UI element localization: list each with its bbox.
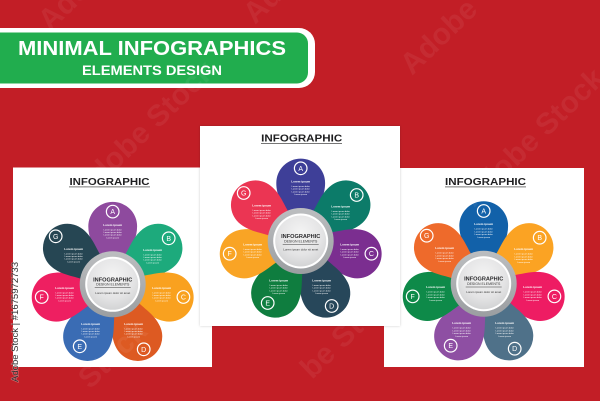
- petal C: Lorem ipsum: [152, 286, 171, 290]
- petal G: Lorem ipsum: [252, 204, 271, 208]
- petal A: Lorem ipsum: [291, 180, 310, 184]
- petal E: [243, 254, 311, 326]
- petal F: Lorem ipsum dolor: [244, 251, 262, 254]
- petal E: [426, 297, 494, 369]
- petal E: Lorem ipsum dolor: [453, 329, 471, 332]
- petal B: [306, 171, 380, 244]
- petal D: D: [512, 346, 517, 353]
- petal E: Lorem ipsum dolor: [270, 287, 288, 290]
- petal D: Lorem ipsum dolor: [125, 333, 143, 336]
- banner: [0, 28, 315, 88]
- petal G: Lorem ipsum dolor: [65, 255, 83, 258]
- petal C: C: [369, 251, 374, 258]
- petal C: Lorem ipsum dolor: [524, 291, 542, 294]
- flower diagram: [27, 202, 198, 369]
- petal G: Lorem ipsum dolor: [436, 254, 454, 257]
- petal G: Lorem ipsum dolor: [253, 214, 271, 217]
- petal F: Lorem ipsum: [55, 286, 74, 290]
- petal B: [118, 214, 192, 287]
- petal E: Lorem ipsum: [84, 335, 97, 338]
- petal F: F: [228, 251, 232, 258]
- petal G: G: [241, 190, 246, 198]
- petal E: Lorem ipsum: [272, 292, 285, 295]
- petal C: Lorem ipsum dolor: [341, 248, 359, 251]
- petal E: Lorem ipsum dolor: [270, 289, 288, 292]
- petal C: [504, 266, 569, 326]
- petal D: Lorem ipsum dolor: [313, 287, 331, 290]
- petal E: Lorem ipsum dolor: [82, 330, 100, 333]
- center hub: DESIGN ELEMENTS: [467, 282, 501, 286]
- petal F: Lorem ipsum dolor: [56, 291, 74, 294]
- center hub: Lorem ipsum dolor sit amet: [466, 290, 501, 294]
- center hub: INFOGRAPHIC: [281, 234, 320, 240]
- petal G: [404, 213, 479, 287]
- petal B: Lorem ipsum dolor: [332, 213, 350, 216]
- petal D: Lorem ipsum: [127, 335, 140, 338]
- petal B: Lorem ipsum: [334, 218, 347, 221]
- petal D: Lorem ipsum dolor: [496, 327, 514, 330]
- banner title: MINIMAL INFOGRAPHICS: [18, 37, 286, 60]
- center hub: Lorem ipsum dolor sit amet: [95, 291, 130, 295]
- petal C: Lorem ipsum dolor: [153, 291, 171, 294]
- petal D: Lorem ipsum: [498, 335, 511, 338]
- petal D: Lorem ipsum dolor: [496, 329, 514, 332]
- petal G: Lorem ipsum: [64, 247, 83, 251]
- panel: left infographic: [13, 168, 212, 369]
- petal A: [88, 202, 137, 258]
- petal D: Lorem ipsum dolor: [313, 284, 331, 287]
- petal B: Lorem ipsum: [143, 248, 162, 252]
- petal D: Lorem ipsum: [495, 321, 514, 325]
- center hub: DESIGN ELEMENTS: [284, 239, 318, 243]
- petal G: Lorem ipsum: [438, 260, 451, 263]
- petal A: Lorem ipsum dolor: [104, 231, 122, 234]
- petal B: Lorem ipsum dolor: [144, 253, 162, 256]
- petal G: Lorem ipsum: [255, 217, 268, 220]
- petal A: Lorem ipsum dolor: [292, 185, 310, 188]
- petal B: Lorem ipsum dolor: [515, 255, 533, 258]
- petal D: Lorem ipsum: [315, 292, 328, 295]
- petal A: [459, 201, 508, 258]
- panel title: INFOGRAPHIC: [261, 132, 343, 144]
- petal F: Lorem ipsum: [426, 285, 445, 289]
- petal E: Lorem ipsum dolor: [270, 284, 288, 287]
- petal E: E: [448, 343, 453, 350]
- petal B: Lorem ipsum: [331, 204, 350, 208]
- petal C: C: [552, 294, 557, 301]
- center hub: [268, 208, 334, 274]
- petal C: C: [181, 294, 186, 301]
- petal F: Lorem ipsum dolor: [56, 297, 74, 300]
- petal G: Lorem ipsum dolor: [65, 258, 83, 261]
- petal E: Lorem ipsum dolor: [453, 327, 471, 330]
- panel: right infographic: [384, 168, 584, 369]
- petal B: Lorem ipsum dolor: [144, 256, 162, 259]
- petal A: A: [298, 166, 303, 173]
- banner subtitle: ELEMENTS DESIGN: [82, 63, 222, 78]
- petal C: Lorem ipsum: [343, 256, 356, 259]
- petal B: Lorem ipsum dolor: [515, 258, 533, 261]
- petal E: Lorem ipsum: [81, 322, 100, 326]
- petal F: [398, 266, 464, 326]
- petal A: A: [110, 209, 115, 216]
- petal F: [27, 266, 93, 326]
- petal F: Lorem ipsum: [246, 256, 259, 259]
- petal B: B: [166, 236, 171, 243]
- petal B: Lorem ipsum: [517, 261, 530, 264]
- center hub: [451, 251, 517, 317]
- petal B: [489, 213, 563, 287]
- petal E: [55, 297, 123, 369]
- petal A: Lorem ipsum: [477, 236, 490, 239]
- center hub: DESIGN ELEMENTS: [96, 283, 130, 287]
- petal F: Lorem ipsum dolor: [244, 253, 262, 256]
- petal D: Lorem ipsum dolor: [125, 327, 143, 330]
- petal D: Lorem ipsum dolor: [496, 332, 514, 335]
- petal A: Lorem ipsum dolor: [292, 190, 310, 193]
- petal A: Lorem ipsum: [294, 193, 307, 196]
- petal A: Lorem ipsum: [106, 236, 119, 239]
- petal G: G: [424, 233, 429, 240]
- petal C: Lorem ipsum dolor: [153, 294, 171, 297]
- petal D: D: [329, 304, 334, 310]
- petal G: G: [53, 234, 58, 241]
- petal D: Lorem ipsum: [312, 278, 331, 282]
- petal F: F: [411, 294, 415, 301]
- petal E: Lorem ipsum: [455, 335, 468, 338]
- petal B: Lorem ipsum dolor: [515, 253, 533, 256]
- petal A: Lorem ipsum dolor: [104, 228, 122, 231]
- flower diagram: [215, 159, 386, 326]
- petal C: [321, 223, 386, 283]
- petal D: Lorem ipsum: [124, 322, 143, 326]
- watermarks: be Stock: [294, 274, 407, 385]
- petal D: [290, 254, 358, 326]
- petal E: E: [77, 344, 82, 351]
- petal F: Lorem ipsum: [58, 299, 71, 302]
- center hub: INFOGRAPHIC: [93, 277, 132, 283]
- petal E: Lorem ipsum: [269, 278, 288, 282]
- center hub: INFOGRAPHIC: [464, 277, 503, 283]
- petal C: Lorem ipsum dolor: [341, 253, 359, 256]
- petal D: [102, 297, 170, 369]
- petal G: [221, 171, 296, 244]
- petal G: Lorem ipsum dolor: [436, 252, 454, 255]
- petal G: Lorem ipsum: [435, 246, 454, 250]
- petal F: Lorem ipsum dolor: [56, 294, 74, 297]
- petal G: Lorem ipsum dolor: [65, 252, 83, 255]
- center hub: Lorem ipsum dolor sit amet: [283, 248, 318, 252]
- petal C: Lorem ipsum dolor: [153, 297, 171, 300]
- panel title: INFOGRAPHIC: [445, 176, 526, 188]
- petal B: B: [537, 235, 542, 242]
- petal A: Lorem ipsum: [474, 222, 493, 226]
- petal A: Lorem ipsum: [103, 223, 122, 227]
- petal C: Lorem ipsum dolor: [524, 293, 542, 296]
- petal B: Lorem ipsum dolor: [332, 210, 350, 213]
- petal C: Lorem ipsum dolor: [524, 296, 542, 299]
- watermarks: Stock: [72, 314, 154, 395]
- petal F: Lorem ipsum dolor: [427, 291, 445, 294]
- petal G: Lorem ipsum dolor: [436, 257, 454, 260]
- flower diagram: [398, 201, 569, 369]
- petal F: F: [40, 294, 44, 301]
- petal C: Lorem ipsum: [526, 299, 539, 302]
- watermarks: Adobe Stock: [67, 54, 222, 205]
- petal B: Lorem ipsum dolor: [144, 259, 162, 262]
- center hub: [80, 251, 146, 317]
- petal D: D: [141, 347, 146, 354]
- petal D: [473, 297, 541, 369]
- petal D: Lorem ipsum dolor: [125, 330, 143, 333]
- petal C: [133, 266, 198, 326]
- petal F: Lorem ipsum dolor: [427, 293, 445, 296]
- petal A: Lorem ipsum dolor: [475, 228, 493, 231]
- petal E: Lorem ipsum: [452, 321, 471, 325]
- panel: center infographic: [200, 126, 400, 326]
- petal E: Lorem ipsum dolor: [82, 327, 100, 330]
- petal F: Lorem ipsum dolor: [244, 248, 262, 251]
- petal E: E: [265, 300, 270, 308]
- petal A: A: [481, 209, 486, 216]
- petal C: Lorem ipsum: [523, 285, 542, 289]
- petal A: Lorem ipsum dolor: [475, 230, 493, 233]
- petal B: Lorem ipsum: [146, 261, 159, 264]
- petal D: Lorem ipsum dolor: [313, 289, 331, 292]
- petal F: [215, 223, 281, 283]
- panel title: INFOGRAPHIC: [70, 176, 150, 188]
- petal G: Lorem ipsum dolor: [253, 209, 271, 212]
- petal F: Lorem ipsum dolor: [427, 296, 445, 299]
- petal G: Lorem ipsum dolor: [253, 212, 271, 215]
- petal E: Lorem ipsum dolor: [82, 333, 100, 336]
- petal A: Lorem ipsum dolor: [292, 188, 310, 191]
- stock id vertical text: Adobe Stock | #1675972733: [10, 262, 21, 382]
- petal C: Lorem ipsum: [340, 242, 359, 246]
- petal G: Lorem ipsum: [67, 260, 80, 263]
- petal B: B: [354, 192, 359, 200]
- petal A: [276, 159, 325, 215]
- petal B: Lorem ipsum dolor: [332, 215, 350, 218]
- petal G: [33, 214, 108, 287]
- petal C: Lorem ipsum dolor: [341, 251, 359, 254]
- petal C: Lorem ipsum: [155, 299, 168, 302]
- petal F: Lorem ipsum: [429, 299, 442, 302]
- petal F: Lorem ipsum: [243, 242, 262, 246]
- petal B: Lorem ipsum: [514, 247, 533, 251]
- petal E: Lorem ipsum dolor: [453, 332, 471, 335]
- petal A: Lorem ipsum dolor: [475, 233, 493, 236]
- petal A: Lorem ipsum dolor: [104, 234, 122, 237]
